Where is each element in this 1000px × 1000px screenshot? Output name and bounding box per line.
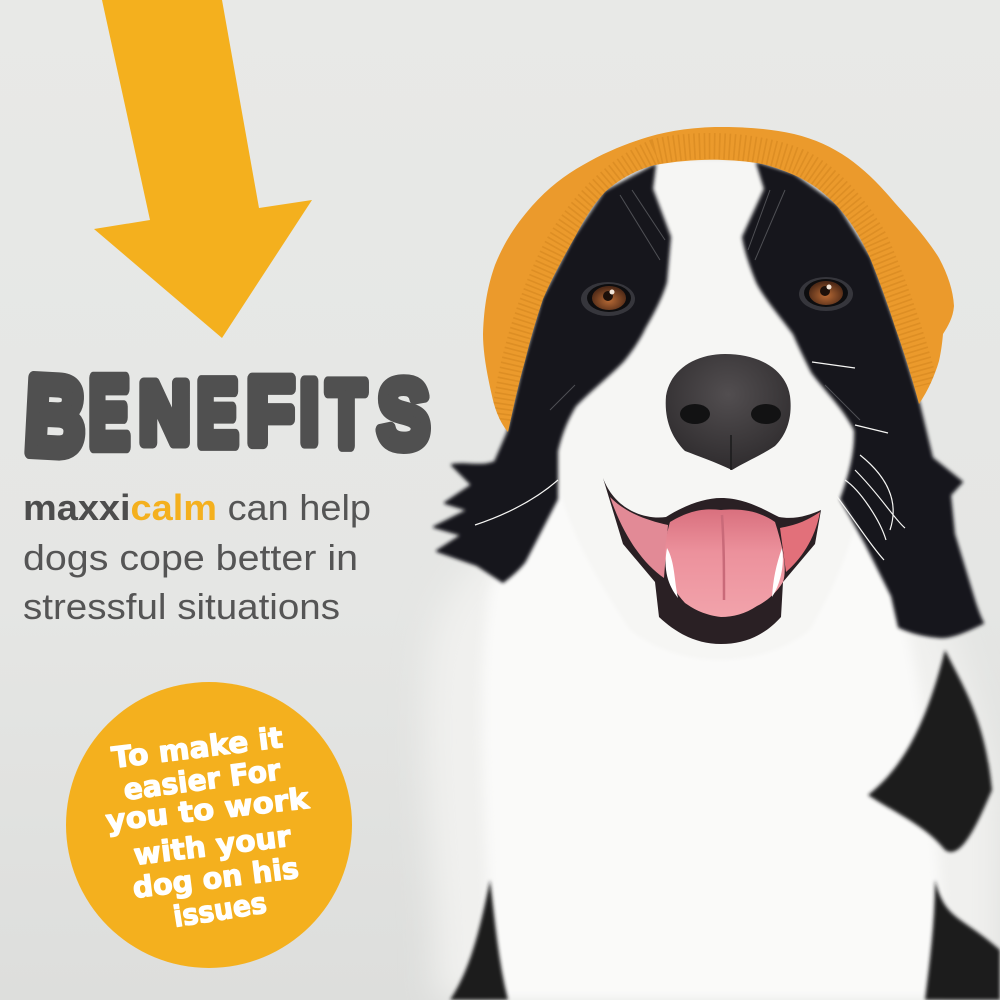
callout text	[104, 720, 311, 934]
teeth	[666, 548, 678, 598]
heading: benefits: F	[247, 359, 294, 464]
heading: benefits: T	[327, 362, 366, 466]
callout circle	[66, 682, 352, 968]
callout text: To make it	[110, 720, 285, 775]
arrow pointing down	[94, 0, 312, 338]
heading: benefits: I	[300, 361, 319, 462]
mouth	[603, 478, 821, 644]
tongue	[665, 509, 785, 617]
beanie ribbing	[504, 146, 925, 420]
heading: benefits: E	[197, 361, 238, 465]
text block: description: stressful situations	[23, 586, 340, 627]
dog white head	[555, 160, 863, 660]
dog white body	[425, 520, 1000, 1000]
whiskers	[475, 362, 905, 560]
callout text: with your	[132, 819, 293, 872]
dog black fur bottom	[450, 880, 508, 1000]
text block: description: dogs cope better in	[23, 537, 358, 578]
heading: benefits	[23, 355, 429, 479]
heading: benefits: N	[139, 364, 190, 462]
callout text: you to work	[104, 781, 311, 838]
left eye	[581, 282, 635, 316]
callout text: easier For	[121, 753, 283, 807]
right eye	[799, 277, 853, 311]
orange beanie	[483, 127, 954, 432]
callout text: dog on his	[131, 851, 301, 905]
nose	[666, 354, 791, 470]
dog black fur left	[434, 165, 670, 582]
grey fur highlights	[550, 190, 860, 420]
callout text: issues	[171, 886, 269, 934]
text block: description	[23, 487, 371, 627]
heading: benefits: S	[378, 361, 429, 468]
dog black fur right	[743, 163, 983, 637]
heading: benefits: E	[89, 357, 129, 469]
text block: description: maxxicalm can help	[23, 487, 371, 528]
photo: dog in orange hat	[425, 120, 1000, 1000]
heading: benefits: B	[23, 355, 88, 479]
dog black fur lower right	[868, 650, 992, 852]
